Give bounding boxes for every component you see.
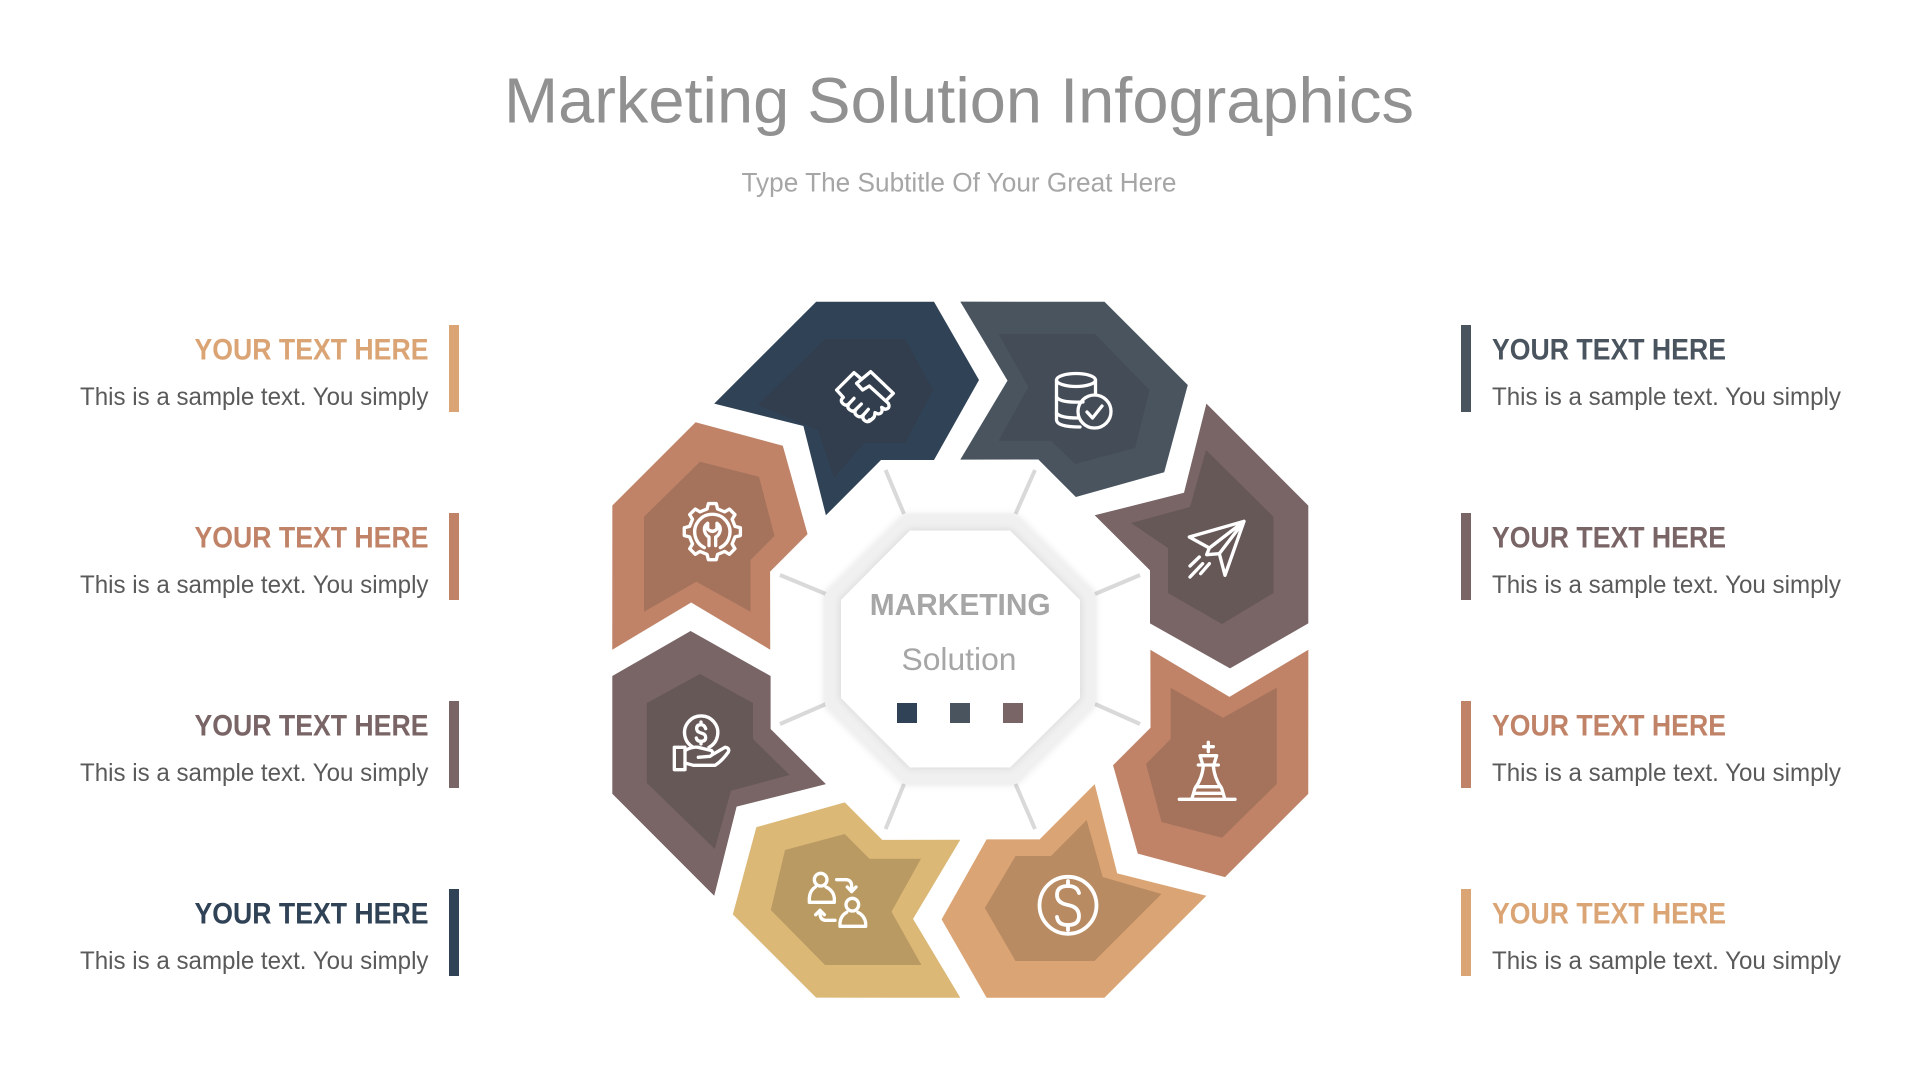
- left item 1: This is a sample text. You simply: [80, 383, 429, 411]
- left text blocks: [80, 325, 459, 976]
- center octagon: [825, 515, 1095, 784]
- left item 4: This is a sample text. You simply: [80, 947, 429, 975]
- right item 1: This is a sample text. You simply: [1492, 383, 1841, 411]
- left item 4: YOUR TEXT HERE: [194, 898, 428, 930]
- left item 2: [80, 513, 459, 600]
- right text blocks: [1461, 325, 1841, 976]
- segment: yellow: [701, 732, 1039, 1070]
- right item 4: [1461, 889, 1841, 976]
- subtitle: Type The Subtitle Of Your Great Here: [742, 168, 1176, 198]
- right item 1: YOUR TEXT HERE: [1492, 334, 1726, 366]
- left item 3: YOUR TEXT HERE: [194, 710, 428, 742]
- right item 4: This is a sample text. You simply: [1492, 947, 1841, 975]
- left item 2: This is a sample text. You simply: [80, 571, 429, 599]
- icon: paper plane: [1189, 521, 1244, 577]
- center heading: MARKETING: [870, 587, 1051, 622]
- segment: brown upper right: [1095, 404, 1308, 668]
- right item 3: [1461, 701, 1841, 788]
- left item 1: [80, 325, 459, 412]
- title: Marketing Solution Infographics: [504, 65, 1414, 137]
- right item 2: YOUR TEXT HERE: [1492, 522, 1726, 554]
- segment: terracotta upper left: [540, 390, 878, 729]
- segment: slate: [881, 230, 1220, 568]
- icon: dollar coin: [1040, 877, 1096, 934]
- center subheading: Solution: [902, 641, 1016, 677]
- left item 3: [80, 701, 459, 788]
- icon: hand with coin: [674, 716, 729, 770]
- center squares: [897, 703, 1023, 723]
- icon: gear with wrench: [684, 504, 740, 560]
- icon: handshake: [837, 372, 893, 422]
- right item 1: [1461, 325, 1841, 412]
- segment: orange: [942, 784, 1206, 998]
- left item 3: This is a sample text. You simply: [80, 759, 429, 787]
- right item 2: This is a sample text. You simply: [1492, 571, 1841, 599]
- segment: terracotta lower right: [1042, 571, 1380, 909]
- left item 1: YOUR TEXT HERE: [194, 334, 428, 366]
- octagon diagram: [540, 230, 1380, 1070]
- right item 3: This is a sample text. You simply: [1492, 759, 1841, 787]
- icon: users exchange: [809, 873, 866, 926]
- left item 4: [80, 889, 459, 976]
- icon: chess king: [1179, 742, 1235, 799]
- segment: navy: [714, 302, 979, 515]
- right item 4: YOUR TEXT HERE: [1492, 898, 1726, 930]
- right item 2: [1461, 513, 1841, 600]
- left item 2: YOUR TEXT HERE: [194, 522, 428, 554]
- icon: database check: [1056, 374, 1111, 428]
- right item 3: YOUR TEXT HERE: [1492, 710, 1726, 742]
- segment: brown lower left: [612, 631, 826, 896]
- connector spokes: [780, 470, 1140, 829]
